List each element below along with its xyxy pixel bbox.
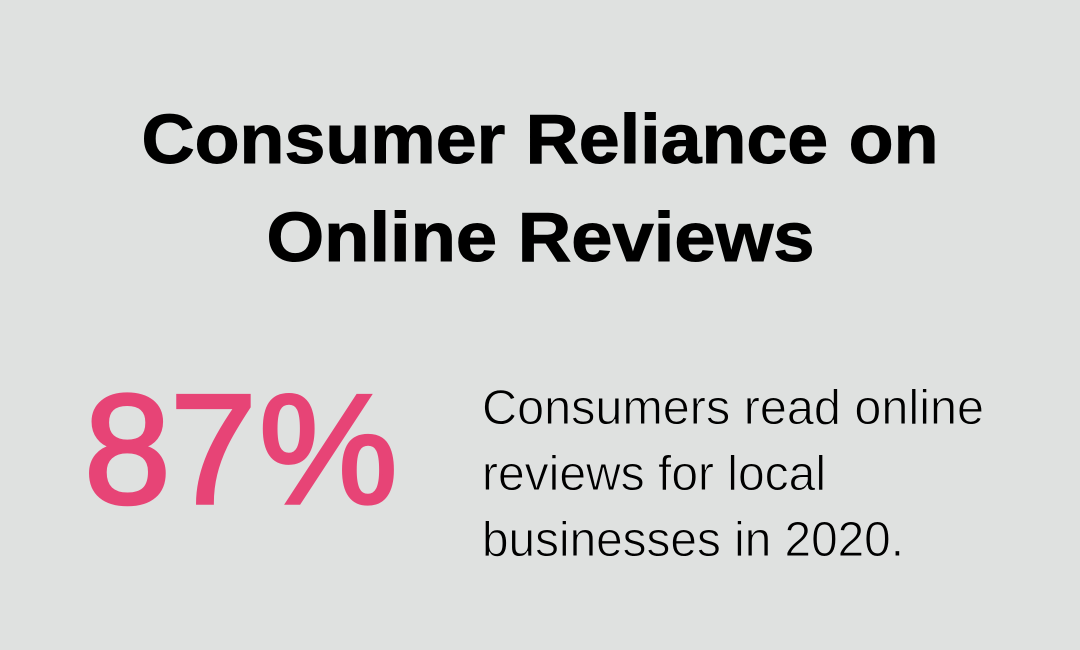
- statistic description: reviews for local: [482, 447, 826, 501]
- statistic: 87%: 87%: [84, 363, 398, 537]
- title: Online Reviews: [266, 198, 814, 276]
- statistic description: [482, 381, 984, 567]
- statistic description: Consumers read online: [482, 381, 984, 435]
- title: Consumer Reliance on: [142, 100, 938, 178]
- title: [142, 100, 938, 276]
- statistic description: businesses in 2020.: [482, 513, 904, 567]
